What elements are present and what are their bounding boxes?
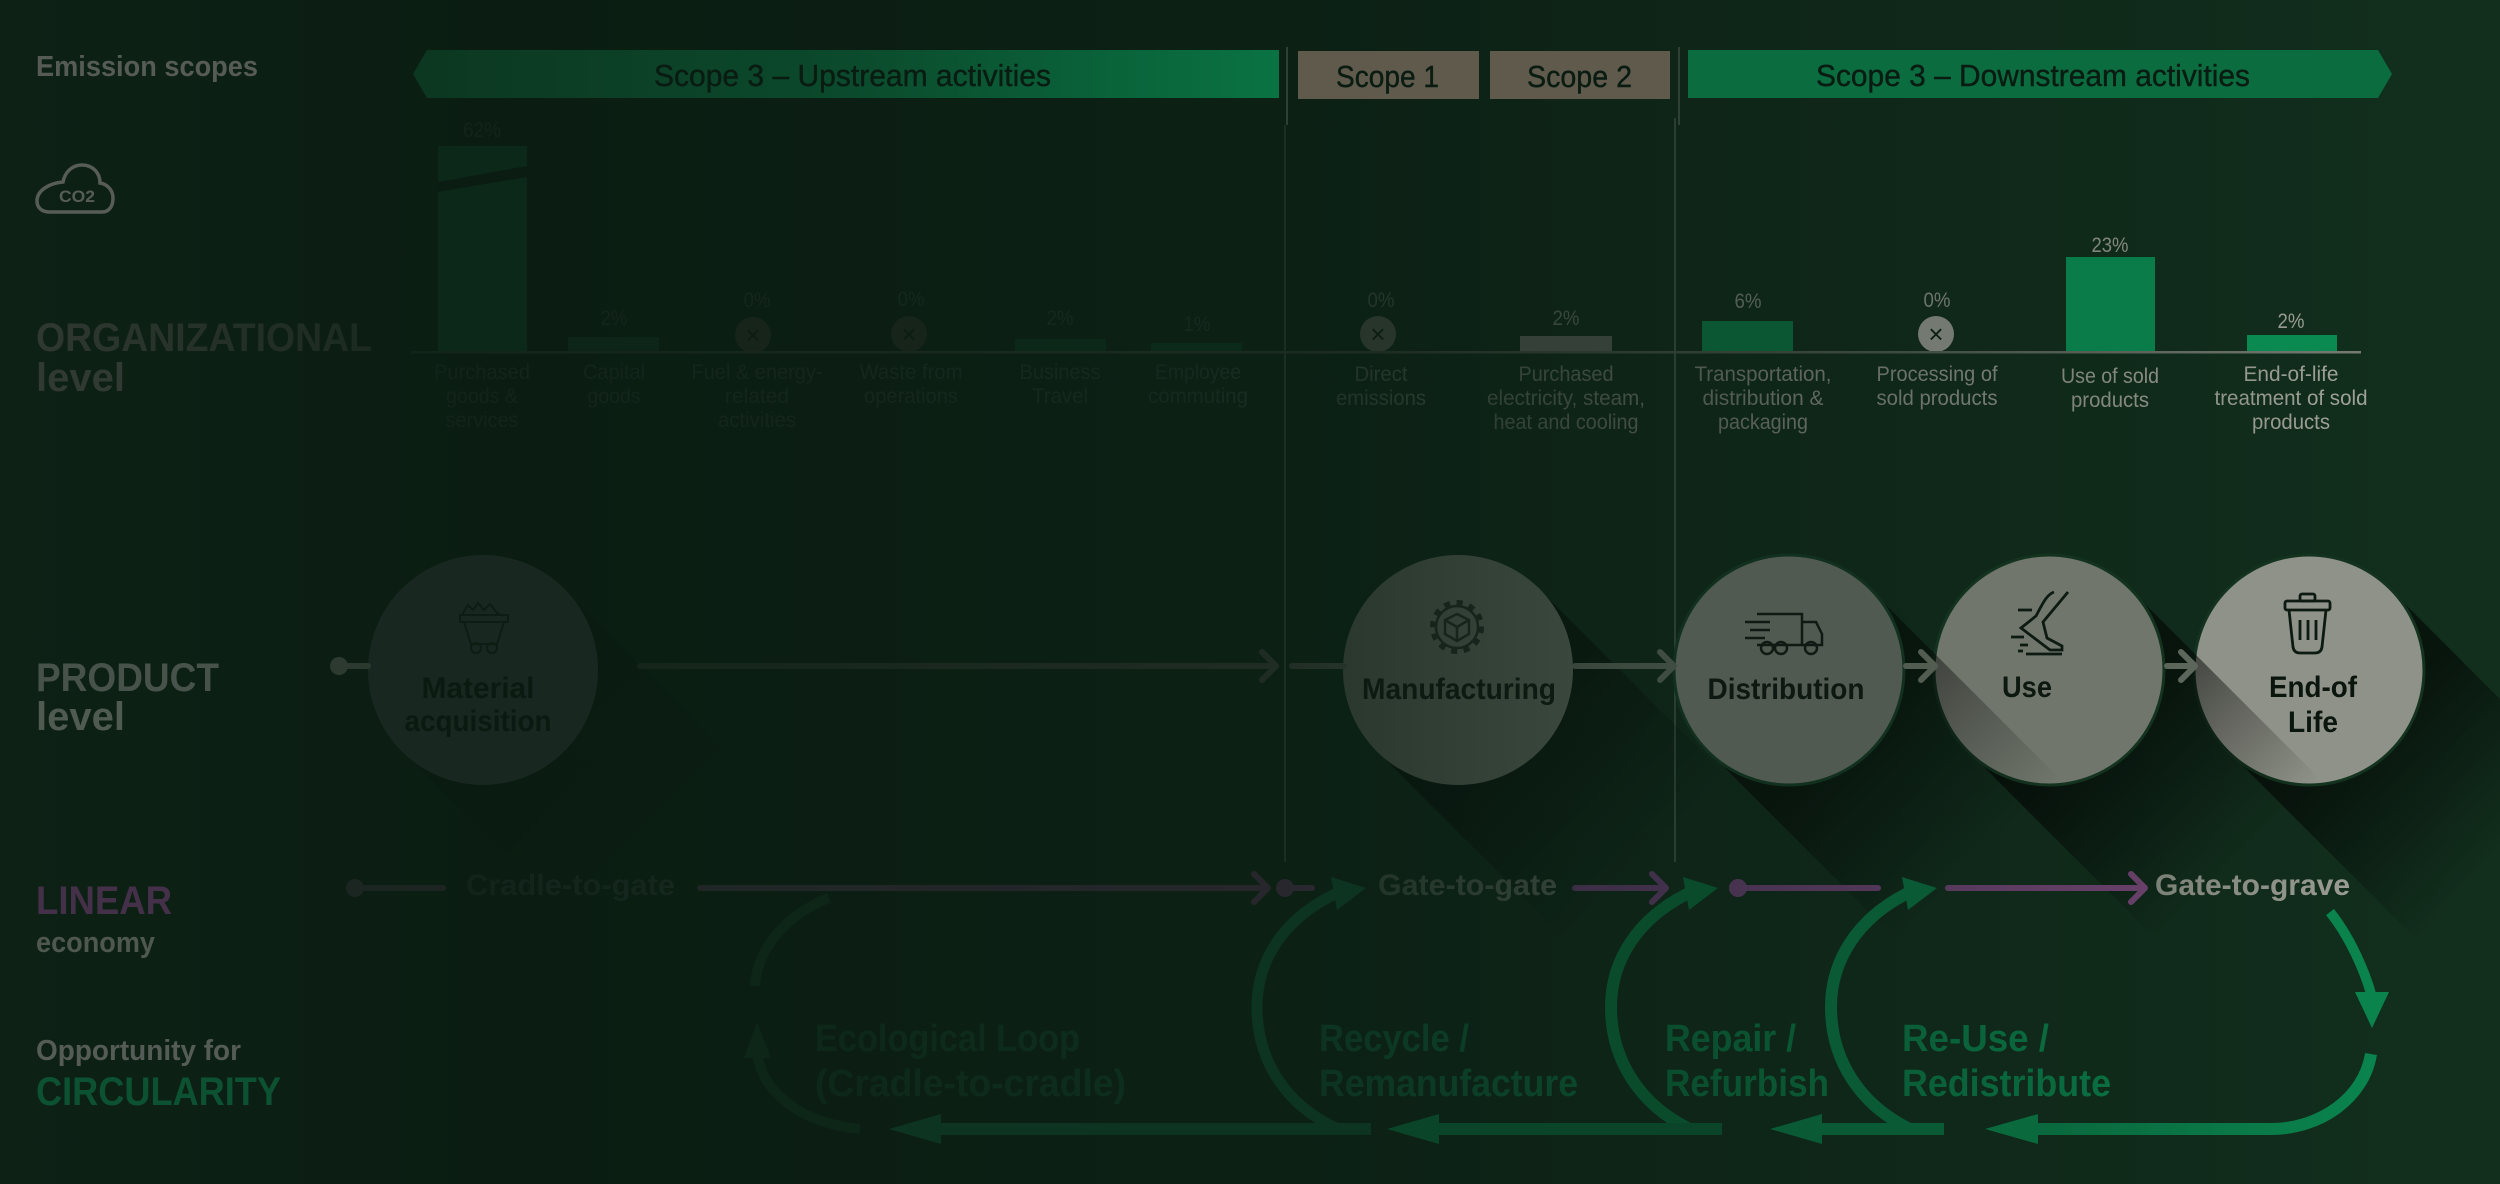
stage label: End-of Life — [2269, 671, 2358, 739]
label: employee commuting: commuting — [1148, 385, 1248, 408]
linear economy flow lines — [355, 874, 2145, 902]
row label: Product level — [36, 656, 219, 739]
loop label: Ecological Loop — [815, 1018, 1126, 1105]
chart baseline — [411, 351, 2361, 354]
label: Cradle-to-gate: Cradle-to-gate — [466, 869, 675, 902]
stage label: Material acquisition: acquisition — [404, 705, 552, 738]
scope header: Scope 3 upstream — [413, 50, 1279, 98]
zero marker: processing — [1918, 289, 1954, 352]
label: employee commuting: Employee — [1155, 361, 1241, 384]
stage: use circle — [1934, 555, 2430, 1051]
loop label: Re-Use / Redistribute: Redistribute — [1902, 1063, 2111, 1105]
loop label: Recycle / Remanufacture — [1319, 1018, 1578, 1105]
row label: Opportunity for circularity: CIRCULARITY — [36, 1070, 281, 1114]
icon: gear with box — [1433, 603, 1481, 651]
product stage circles with long shadows — [368, 555, 2500, 1051]
label: capital goods: Capital — [583, 361, 645, 384]
row label: Product level: level — [36, 695, 125, 739]
arrow: ecological loop — [744, 898, 860, 1129]
stage label: Distribution: Distribution — [1708, 673, 1864, 706]
bar: employee commuting 1% — [1151, 313, 1242, 352]
stage: manufacturing circle — [1343, 555, 1839, 1051]
category labels — [434, 361, 2368, 434]
bar: transportation 6%: 6% — [1734, 290, 1762, 313]
label: Gate-to-gate: Gate-to-gate — [1378, 869, 1557, 902]
stage label: Use: Use — [2002, 671, 2052, 704]
linear flow start dots — [346, 879, 1747, 897]
label: capital goods — [583, 361, 645, 408]
arrow: recycle loop — [889, 877, 1371, 1144]
label: direct emissions: emissions — [1336, 387, 1426, 410]
loop label: Re-Use / Redistribute: Re-Use / — [1902, 1018, 2049, 1060]
label: end-of-life treatment: treatment of sold — [2214, 387, 2368, 410]
label: processing: Processing of — [1876, 363, 1998, 386]
label: business travel — [1020, 361, 1100, 408]
zero marker: waste: × — [901, 319, 917, 349]
bar: purchased electricity 2%: 2% — [1552, 307, 1580, 330]
bar chart: emissions by category — [411, 119, 2361, 354]
label: transportation: distribution & — [1702, 387, 1824, 410]
stage label: End-of Life: End-of — [2269, 671, 2358, 704]
stage: distribution circle — [1674, 555, 2170, 1051]
product flow start dot — [330, 657, 348, 675]
label: purchased goods and services: goods & — [446, 385, 518, 408]
label: end-of-life treatment: products — [2252, 411, 2330, 434]
label: use of sold products: products — [2071, 389, 2149, 412]
loop label: Repair / Refurbish: Refurbish — [1665, 1063, 1829, 1105]
label: fuel and energy: related — [725, 385, 789, 408]
label: use of sold products — [2061, 365, 2159, 412]
zero marker: waste: 0% — [898, 288, 924, 311]
loop label: Re-Use / Redistribute — [1902, 1018, 2111, 1105]
circular loop arrows — [744, 877, 2389, 1144]
label: capital goods: goods — [588, 385, 640, 408]
icon: CO2 cloud — [37, 165, 113, 212]
loop label: Repair / Refurbish: Repair / — [1665, 1018, 1796, 1060]
stage label: Material acquisition — [404, 672, 552, 738]
label: business travel: Travel — [1032, 385, 1088, 408]
stage: end-of-life circle — [2194, 555, 2500, 1051]
bar: business travel 2%: 2% — [1046, 307, 1074, 330]
row label: Opportunity for circularity — [36, 1035, 281, 1114]
loop label: Ecological Loop: Ecological Loop — [815, 1018, 1080, 1060]
label: processing — [1876, 363, 1998, 410]
label: processing: sold products — [1876, 387, 1998, 410]
bar: capital goods 2%: 2% — [600, 307, 628, 330]
scope header: Scope 1: Scope 1 — [1336, 59, 1439, 94]
zero marker: direct emissions: 0% — [1368, 289, 1394, 312]
row label: Emission scopes: Emission scopes — [36, 51, 258, 83]
label: use of sold products: Use of sold — [2061, 365, 2159, 388]
stage label: End-of Life: Life — [2288, 706, 2338, 739]
scope header: Scope 3 upstream: Scope 3 – Upstream activities — [654, 58, 1051, 93]
label: waste from operations: Waste from — [860, 361, 962, 384]
row label: Linear economy — [36, 879, 172, 959]
row label: Organizational level: ORGANIZATIONAL — [36, 316, 372, 360]
label: end-of-life treatment — [2214, 363, 2368, 434]
stage label: Manufacturing: Manufacturing — [1362, 673, 1556, 706]
icon: delivery truck — [1745, 614, 1822, 654]
label: purchased goods and services — [434, 361, 530, 432]
bar: transportation 6% — [1702, 290, 1793, 352]
icon: running foot — [2011, 592, 2068, 654]
bar: use of sold products 23% — [2066, 234, 2155, 352]
row label: Opportunity for circularity: Opportunity for — [36, 1035, 241, 1067]
row label: Organizational level: level — [36, 356, 125, 400]
row label: Product level: PRODUCT — [36, 656, 219, 700]
product flow line and arrows — [339, 652, 2195, 680]
stage: material acquisition circle — [368, 555, 764, 951]
label: transportation: Transportation, — [1694, 363, 1832, 386]
arrow: re-use loop — [1770, 877, 1944, 1144]
label: end-of-life treatment: End-of-life — [2244, 363, 2338, 386]
label: fuel and energy: activities — [718, 409, 796, 432]
scope header: Scope 2 — [1490, 51, 1670, 99]
bar: employee commuting 1%: 1% — [1184, 313, 1210, 336]
zero marker: direct emissions: × — [1370, 319, 1386, 349]
label: fuel and energy: Fuel & energy- — [692, 361, 823, 384]
label: purchased electricity: Purchased — [1518, 363, 1614, 386]
zero marker: direct emissions — [1360, 289, 1396, 352]
label: purchased electricity: electricity, steam, — [1487, 387, 1645, 410]
scope header: Scope 1 — [1298, 51, 1479, 99]
label: purchased goods and services: services — [446, 409, 518, 432]
row label: Linear economy: LINEAR — [36, 879, 172, 923]
bar: end-of-life 2%: 2% — [2278, 310, 2304, 333]
zero marker: processing: 0% — [1924, 289, 1950, 312]
bar: business travel 2% — [1015, 307, 1106, 352]
label: business travel: Business — [1020, 361, 1100, 384]
label: direct emissions — [1336, 363, 1426, 410]
label: waste from operations: operations — [864, 385, 958, 408]
loop label: Ecological Loop: (Cradle-to-cradle) — [815, 1063, 1126, 1105]
label: purchased electricity: heat and cooling — [1494, 411, 1638, 434]
label: purchased electricity — [1487, 363, 1645, 434]
loop label: Recycle / Remanufacture: Recycle / — [1319, 1018, 1469, 1060]
arrow: end of life to re-use — [1985, 912, 2389, 1144]
zero marker: waste — [891, 288, 927, 352]
bar: capital goods 2% — [568, 307, 659, 352]
loop label: Repair / Refurbish — [1665, 1018, 1829, 1105]
label: employee commuting — [1148, 361, 1248, 408]
icon: trash bin — [2285, 594, 2330, 653]
label: transportation: packaging — [1718, 411, 1808, 434]
loop label: Recycle / Remanufacture: Remanufacture — [1319, 1063, 1578, 1105]
icon: mine cart — [460, 603, 508, 653]
zero marker: fuel and energy — [735, 289, 771, 353]
label: transportation — [1694, 363, 1832, 434]
zero marker: fuel and energy: 0% — [744, 289, 770, 312]
label: direct emissions: Direct — [1354, 363, 1408, 386]
scope divider lines — [1285, 47, 1679, 862]
label: fuel and energy — [692, 361, 823, 432]
zero marker: processing: × — [1928, 319, 1944, 349]
stage label: Material acquisition: Material — [422, 672, 534, 705]
label: Gate-to-grave: Gate-to-grave — [2155, 869, 2350, 902]
label: waste from operations — [860, 361, 962, 408]
scope header: Scope 3 downstream — [1688, 50, 2392, 98]
scope header: Scope 2: Scope 2 — [1527, 59, 1632, 94]
label: purchased goods and services: Purchased — [434, 361, 530, 384]
row label: Linear economy: economy — [36, 927, 155, 959]
zero marker: fuel and energy: × — [745, 320, 761, 350]
bar: end-of-life 2% — [2247, 310, 2337, 352]
bar: purchased goods 62%: 62% — [463, 119, 501, 142]
bar: purchased goods 62% — [438, 119, 527, 352]
row label: Organizational level — [36, 316, 372, 400]
icon: CO2 cloud: CO2 — [59, 187, 95, 206]
arrow: repair loop — [1387, 877, 1722, 1144]
bar: purchased electricity 2% — [1520, 307, 1612, 352]
scope header: Scope 3 downstream: Scope 3 – Downstream activities — [1816, 58, 2250, 93]
bar: use of sold products 23%: 23% — [2092, 234, 2128, 257]
